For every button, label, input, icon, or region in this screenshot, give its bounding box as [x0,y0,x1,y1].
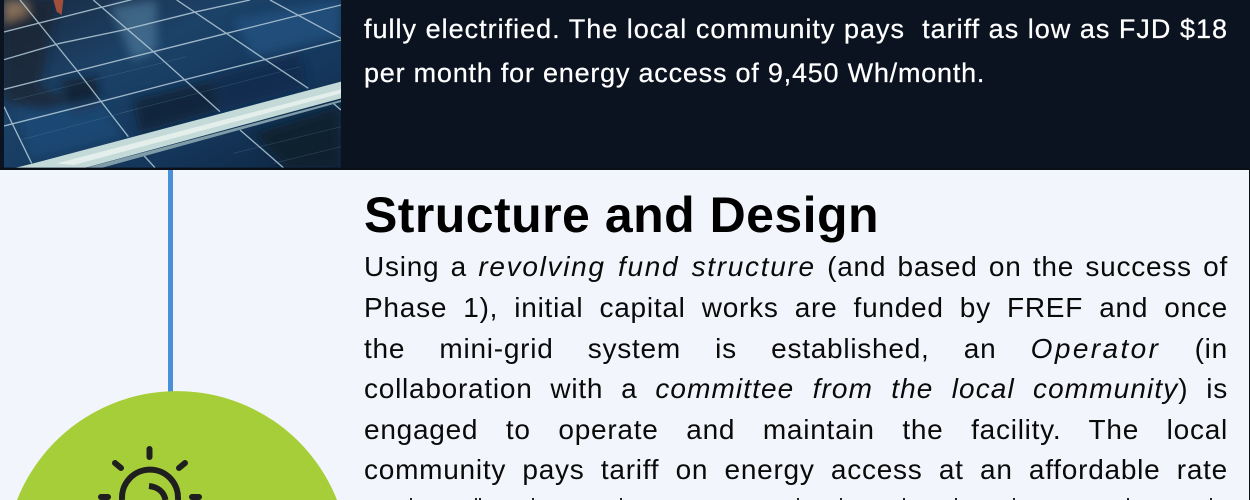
photo: solar panel close-up [4,0,341,168]
text block: structure and design body: engaged to operate and maintain the facility. The local [364,414,1228,445]
text: closing lines of the intro paragraph: per month for energy access of 9,450 Wh/month. [364,58,985,88]
clipped next text line: only illegible ascender tips are visible [410,498,1212,500]
icon: green circle with light bulb [17,391,337,500]
text: closing lines of the intro paragraph [364,14,1228,88]
heading: Structure and Design [364,187,879,243]
text block: structure and design body: Using a revolving fund structure (and based on the success of [364,251,1228,282]
text block: structure and design body [364,251,1228,485]
text: closing lines of the intro paragraph: fully electrified. The local community pays tariff as low as FJD $18 [364,14,1228,44]
divider: right edge rule [1249,170,1250,500]
panel: dark header band [0,0,1250,170]
text block: structure and design body: community pays tariff on energy access at an affordable rate [364,454,1228,485]
text block: structure and design body: collaboration with a committee from the local community) is [364,373,1228,404]
text block: structure and design body: the mini-grid system is established, an Operator (in [364,333,1228,364]
timeline connector [168,170,173,392]
divider: header bottom rule [0,168,1250,170]
text block: structure and design body: Phase 1), initial capital works are funded by FREF and once [364,292,1228,323]
